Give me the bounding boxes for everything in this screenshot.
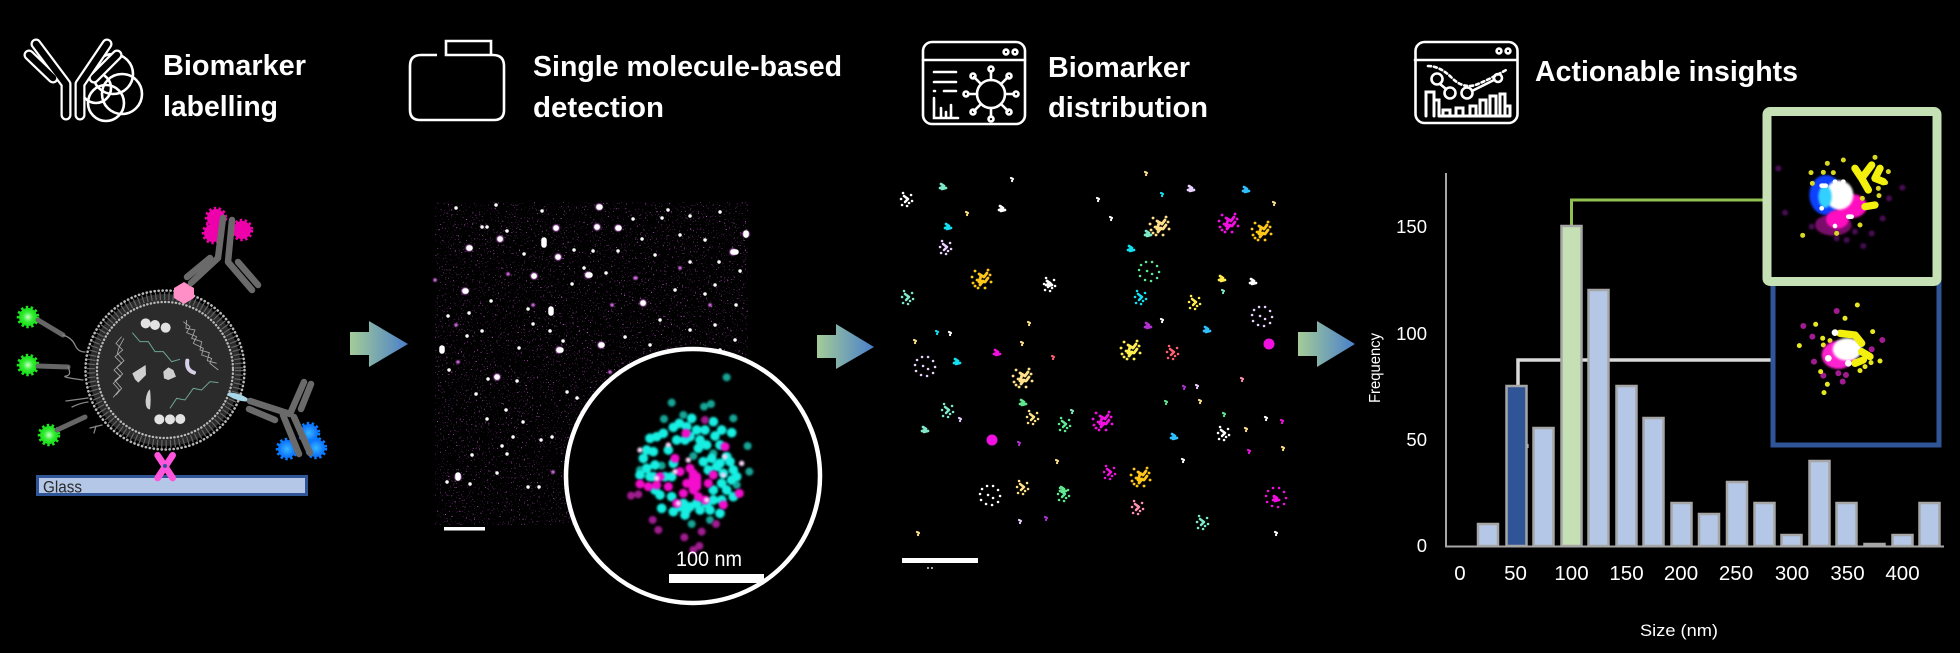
icon: virus dashboard xyxy=(923,42,1025,124)
inset: 50 nm vesicle xyxy=(1773,270,1939,445)
x tick labels xyxy=(1454,562,1920,585)
vesicle xyxy=(86,290,244,450)
magenta fluorophores xyxy=(204,208,252,242)
scale bar xyxy=(902,558,978,568)
panel: biomarker distribution clusters xyxy=(901,172,1286,568)
x tick labels: 400 xyxy=(1885,562,1920,585)
scale bar xyxy=(444,527,485,530)
heading: biomarker labelling xyxy=(163,50,306,123)
linkers xyxy=(38,320,102,433)
bars xyxy=(1478,226,1940,546)
antibody: right xyxy=(249,382,311,454)
magenta spots xyxy=(435,268,710,472)
x tick labels: 150 xyxy=(1609,562,1644,585)
heading: single molecule-based detection xyxy=(533,51,842,124)
icon: case xyxy=(410,41,504,120)
green fluorophores xyxy=(18,308,58,444)
heading: single molecule-based detection: Single molecule-based xyxy=(533,51,842,83)
axes xyxy=(1446,173,1944,546)
y tick labels xyxy=(1396,216,1427,556)
y tick labels: 100 xyxy=(1396,323,1427,344)
y tick labels: 0 xyxy=(1417,535,1427,556)
bar chart: size distribution xyxy=(1367,173,1944,640)
heading: single molecule-based detection: detection xyxy=(533,92,664,124)
scale label: 100 nm: 100 nm xyxy=(676,548,742,571)
hexagon biomarker xyxy=(174,282,194,304)
arrow 3 xyxy=(1298,321,1355,367)
x tick labels: 0 xyxy=(1454,562,1466,585)
icon: insights dashboard xyxy=(1415,42,1518,123)
x tick labels: 200 xyxy=(1664,562,1698,585)
inset: 100 nm vesicle xyxy=(1767,112,1937,282)
heading: biomarker distribution xyxy=(1048,52,1208,124)
biomarker: light blue xyxy=(227,391,249,403)
panel: labelled vesicle on glass xyxy=(18,208,326,496)
speckle background xyxy=(435,202,748,525)
x tick labels: 300 xyxy=(1775,562,1809,585)
blue fluorophores xyxy=(278,424,326,458)
bright localisation spots xyxy=(442,207,746,478)
arrow 2 xyxy=(817,324,874,369)
connector: white bracket xyxy=(1518,360,1772,386)
scale label: 100 nm xyxy=(669,548,764,583)
heading: biomarker labelling: Biomarker xyxy=(163,50,306,82)
antibody: top xyxy=(187,218,258,290)
heading: biomarker distribution: Biomarker xyxy=(1048,52,1190,84)
magnified circle xyxy=(566,349,820,603)
axis title: frequency: Frequency xyxy=(1367,333,1384,403)
pink halos xyxy=(458,207,746,477)
icon: antibody and biomarker xyxy=(29,44,142,121)
x tick labels: 350 xyxy=(1830,562,1865,585)
heading: actionable insights: Actionable insights xyxy=(1535,56,1798,88)
arrow 1 xyxy=(350,321,408,367)
panel: single molecule image xyxy=(435,202,820,603)
heading: biomarker distribution: distribution xyxy=(1048,92,1208,124)
x tick labels: 100 xyxy=(1554,562,1589,585)
axis title: size: Size (nm) xyxy=(1640,621,1718,640)
y tick labels: 150 xyxy=(1396,216,1427,237)
connector: green bracket xyxy=(1572,200,1764,226)
glass slide: Glass xyxy=(43,478,82,496)
x tick labels: 50 xyxy=(1504,562,1527,585)
heading: biomarker labelling: labelling xyxy=(163,91,278,123)
linker: x anchor xyxy=(158,455,173,478)
x tick labels: 250 xyxy=(1719,562,1753,585)
glass slide xyxy=(38,476,306,496)
y tick labels: 50 xyxy=(1406,429,1427,450)
